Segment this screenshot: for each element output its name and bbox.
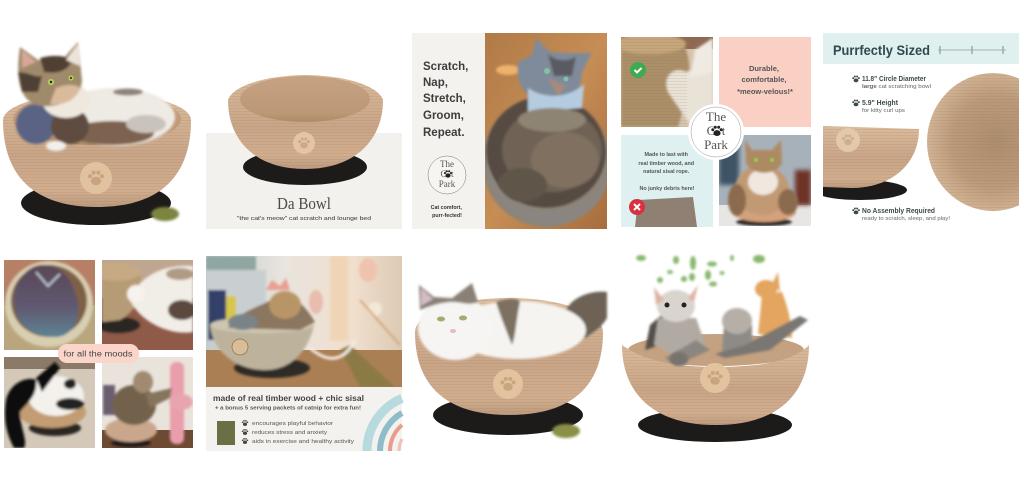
icon: paw bullet — [852, 100, 860, 106]
bullet two: reduces stress and anxiety — [252, 430, 327, 436]
kitten eyes — [664, 302, 686, 308]
eyes — [754, 158, 774, 162]
bowl body — [415, 298, 603, 415]
heading list: Groom, — [423, 110, 464, 122]
tagline: Cat comfort, — [431, 205, 462, 211]
ruler icon — [938, 46, 1006, 54]
photo: curled cat top view — [4, 260, 95, 350]
subheading: + a bonus 5 serving packets of catnip for extra fun! — [215, 406, 361, 412]
heading list: Repeat. — [423, 127, 465, 139]
wood button logo — [293, 132, 315, 154]
benefits list — [242, 420, 354, 445]
blue text panel — [621, 135, 713, 227]
logo: Park — [439, 179, 456, 189]
body text: real timber wood, and — [638, 161, 694, 167]
heading: Da Bowl — [277, 194, 331, 213]
icon: red x — [629, 199, 645, 215]
pink panel text: Durable, — [749, 64, 779, 73]
eyes — [437, 316, 467, 333]
bullet one: encourages playful behavior — [252, 421, 333, 427]
catnip pouch — [217, 421, 235, 445]
eyes — [48, 75, 74, 85]
panel: timber wood and catnip — [206, 256, 402, 451]
kitten paw over rim — [670, 352, 688, 366]
paw bullets — [242, 420, 248, 444]
bowl rope texture — [3, 93, 191, 207]
heading list: Stretch, — [423, 93, 466, 105]
leaves — [636, 255, 765, 286]
logo badge: C t — [707, 123, 726, 138]
heading list: Scratch, — [423, 61, 468, 73]
photo: fluffy cat in bowl — [482, 33, 610, 229]
heading list: Nap, — [423, 77, 448, 89]
photo: paw on rope — [621, 37, 713, 127]
icon: catnip pile — [151, 207, 179, 221]
icon: black base — [21, 181, 171, 225]
wood button logo — [232, 339, 248, 355]
wood button logo — [493, 369, 523, 399]
pink panel — [719, 37, 811, 127]
rainbow arcs — [367, 398, 402, 451]
body text: Made to last with — [645, 152, 688, 158]
panel background — [412, 33, 485, 229]
assembly note: ready to scratch, sleep, and play! — [862, 216, 950, 222]
text background — [206, 387, 402, 451]
size note: large cat scratching bowl — [862, 84, 931, 90]
pill label: for all the moods — [64, 350, 132, 358]
panel: for all the moods — [4, 260, 196, 448]
bowl rim — [486, 159, 607, 224]
header band — [823, 33, 1019, 64]
bowl inner — [13, 93, 181, 145]
panel: durable collage — [614, 34, 811, 227]
bowl inner — [240, 76, 370, 122]
subtitle: "the cat's meow" cat scratch and lounge bed — [237, 216, 371, 222]
icon: black base — [243, 149, 367, 185]
photo: cat sitting in bowl — [719, 135, 811, 226]
bowl rim back — [628, 334, 804, 366]
wood button logo — [700, 363, 730, 393]
height text: 5.9" Height — [862, 100, 899, 107]
bowl rope texture — [415, 298, 603, 415]
bowl body — [3, 93, 191, 207]
pill label — [58, 344, 139, 363]
cat: white with tail — [418, 283, 607, 360]
bowl rope texture — [228, 75, 383, 169]
panel: bowl with tabby cat — [3, 42, 191, 225]
panel: bowl with white cat — [415, 283, 607, 438]
cat: tabby lounging — [16, 42, 175, 151]
heading: Purrfectly Sized — [833, 42, 930, 58]
debris cardboard — [635, 197, 697, 227]
bowl rope texture — [622, 345, 809, 425]
size text: 11.8" Circle Diameter — [862, 76, 926, 83]
kittens — [645, 272, 808, 366]
logo badge — [688, 104, 744, 160]
photo: cat in bowl with toys — [206, 256, 402, 387]
heading: made of real timber wood + chic sisal — [213, 393, 364, 403]
side view of bowl — [813, 126, 919, 200]
body text: natural sisal rope. — [643, 169, 690, 175]
pink panel text: *meow-velous!* — [737, 87, 793, 96]
logo badge: The — [706, 109, 726, 124]
panel background — [206, 133, 402, 229]
panel: Scratch Nap Stretch — [412, 33, 610, 229]
photo: tabby with pink post — [102, 357, 193, 448]
pink panel text: comfortable, — [741, 75, 786, 84]
eyes — [544, 68, 568, 82]
bowl body — [622, 345, 809, 425]
logo — [428, 156, 466, 194]
icon: black base — [433, 395, 583, 435]
panel: Da Bowl — [206, 75, 402, 229]
bullet three: aids in exercise and healthy activity — [252, 439, 354, 445]
body text: No junky debris here! — [639, 186, 695, 192]
icon: paw bullet — [852, 208, 860, 214]
icon: paw bullet — [852, 76, 860, 82]
logo: C t — [440, 169, 454, 179]
assembly text: No Assembly Required — [862, 208, 935, 215]
top view of bowl — [927, 73, 1024, 211]
height note: for kitty curl ups — [862, 108, 905, 114]
icon: black base — [638, 408, 792, 442]
wood button logo — [80, 162, 112, 194]
tagline: purr-fected! — [432, 213, 462, 219]
panel: bowl with three kittens — [622, 255, 809, 442]
panel: purrfectly sized — [813, 33, 1024, 222]
bowl body — [228, 75, 383, 169]
photo: black and white cat — [4, 357, 95, 448]
logo badge: Park — [704, 137, 728, 152]
logo: The — [440, 159, 454, 169]
icon: catnip pile — [552, 424, 580, 438]
icon: green check — [630, 62, 646, 78]
photo: cat on its back — [102, 260, 193, 350]
